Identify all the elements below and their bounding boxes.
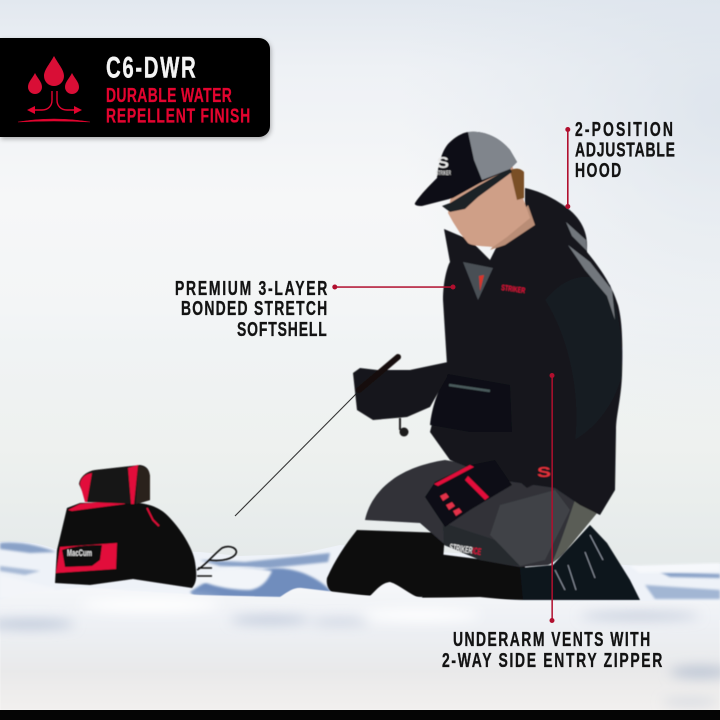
badge panel	[0, 38, 270, 137]
vents label: UNDERARM VENTS WITH	[453, 627, 650, 651]
sunglasses	[442, 168, 512, 212]
badge subtitle: REPELLENT FINISH	[106, 104, 250, 127]
hood label	[575, 117, 675, 182]
hood label: ADJUSTABLE	[575, 138, 675, 161]
lower legs	[327, 530, 445, 597]
gloved hand on knee	[425, 460, 512, 527]
cap logo: S	[437, 155, 449, 172]
softshell label: BONDED STRETCH	[181, 296, 327, 320]
bag loop cord	[197, 547, 236, 576]
vents label	[442, 627, 663, 672]
snow mound	[190, 568, 335, 598]
hood label: 2-POSITION	[575, 117, 673, 141]
angler figure	[327, 132, 640, 600]
hood highlights	[566, 222, 615, 320]
product: tackle bag	[55, 465, 236, 588]
face	[448, 165, 530, 247]
jacket	[430, 188, 622, 515]
badge title: C6-DWR	[106, 52, 196, 85]
badge subtitle: DURABLE WATER	[106, 83, 232, 107]
hood leader line	[565, 127, 570, 209]
reel	[399, 418, 401, 430]
callout: C6-DWR badge	[0, 38, 270, 137]
callout: underarm vents	[442, 373, 663, 672]
fishing rod	[235, 392, 358, 516]
softshell leader line	[332, 284, 456, 290]
softshell label	[175, 276, 328, 341]
bag logo patch	[62, 545, 102, 567]
callout: hood	[565, 117, 675, 209]
softshell label: SOFTSHELL	[237, 317, 327, 341]
angler figure: STRIKER	[436, 171, 451, 177]
softshell label: PREMIUM 3-LAYER	[175, 276, 328, 300]
icon: water drops with arrows	[18, 56, 90, 122]
bottom black bar	[0, 710, 720, 720]
badge subtitle	[106, 83, 250, 127]
bag pull cord	[147, 508, 159, 526]
bag red band	[56, 543, 117, 573]
collar liner	[463, 262, 493, 300]
jacket brand: STRIKER	[501, 283, 526, 295]
bag body	[55, 502, 196, 588]
hood label: HOOD	[575, 158, 621, 182]
angler figure: S	[537, 464, 551, 481]
boot	[520, 525, 640, 600]
cap	[437, 132, 517, 183]
hands and forearm	[353, 362, 448, 420]
bag roll top	[79, 465, 150, 504]
foreground snow	[0, 582, 720, 710]
rod handle	[359, 357, 398, 390]
product: tackle bag: MacCum	[67, 548, 92, 558]
jacket sleeve fold	[545, 277, 622, 440]
vents label: 2-WAY SIDE ENTRY ZIPPER	[442, 648, 663, 672]
vents leader line	[550, 373, 554, 623]
ice pants	[365, 460, 597, 567]
callout: softshell	[175, 276, 456, 341]
distant snow field	[0, 541, 720, 620]
chest pocket	[430, 374, 512, 432]
bag top red trim	[68, 500, 125, 511]
neck	[490, 205, 535, 250]
pants brand text: STRIKERICE	[449, 542, 482, 558]
cuff	[495, 427, 563, 488]
